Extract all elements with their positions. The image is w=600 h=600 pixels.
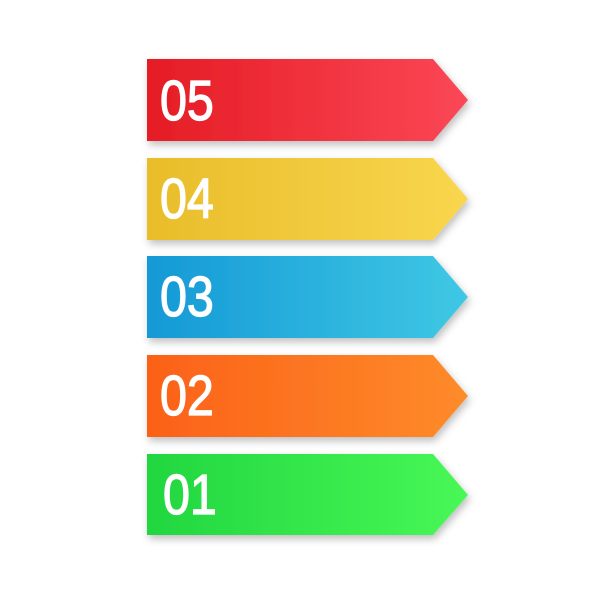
- tab 03: 03: [160, 265, 214, 329]
- tab 04: [147, 158, 468, 240]
- tab 02: 02: [160, 364, 214, 428]
- tab 05: [147, 59, 468, 141]
- tab 05: 05: [160, 69, 214, 133]
- tab 04: 04: [160, 167, 214, 231]
- tab 03: [147, 256, 468, 338]
- tab 01: [147, 454, 468, 535]
- tab 01: 01: [163, 463, 217, 527]
- tab 02: [147, 355, 468, 437]
